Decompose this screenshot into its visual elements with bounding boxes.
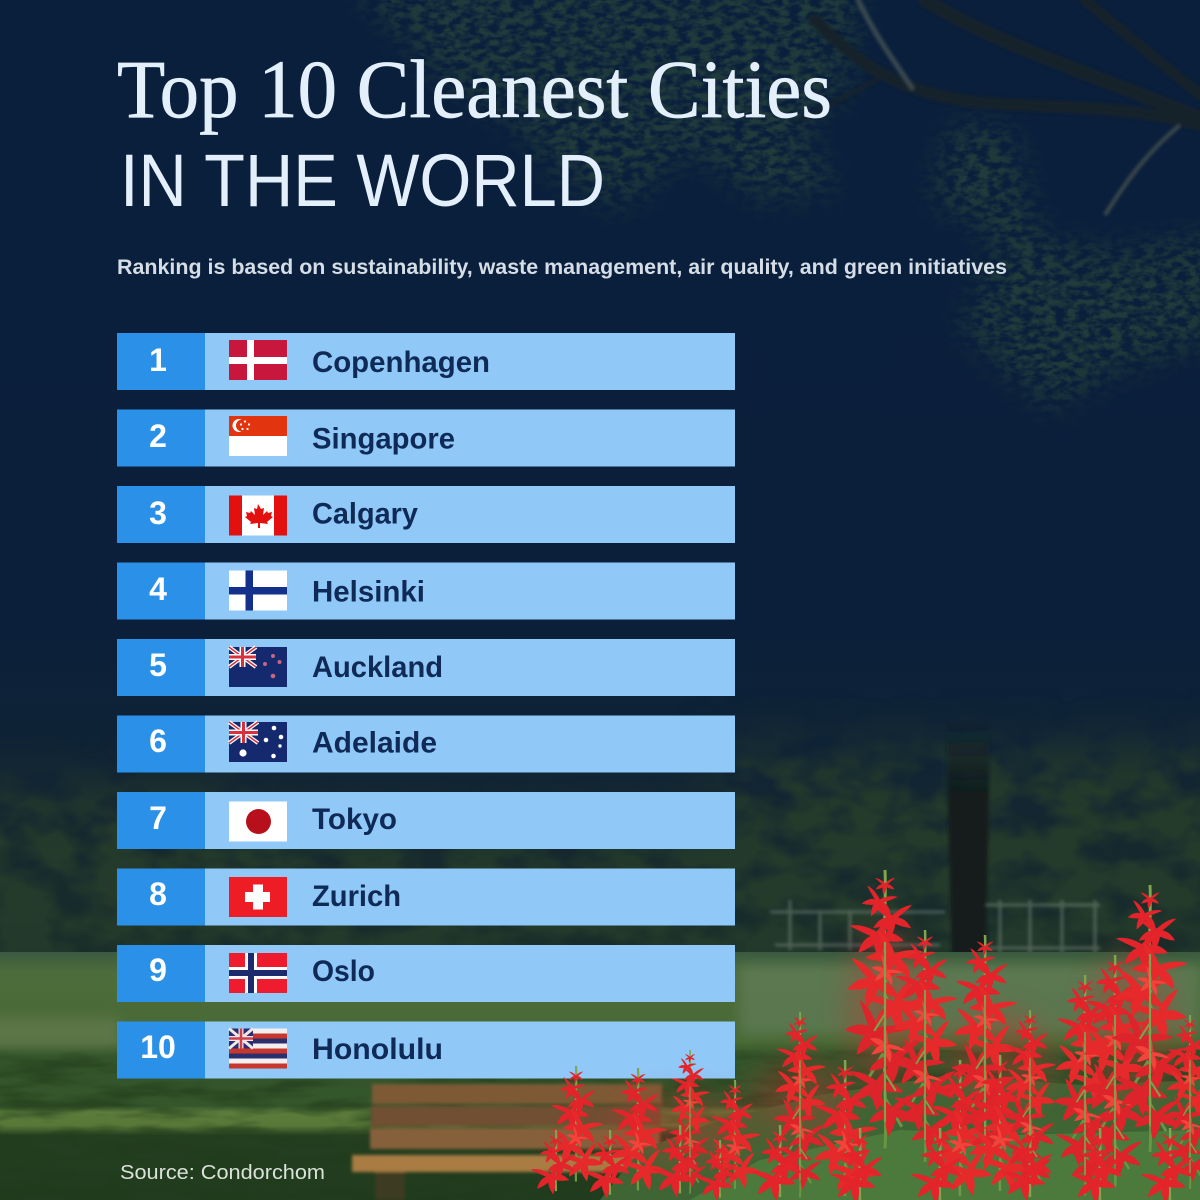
- flag: Australia: [229, 722, 287, 762]
- row 9 Oslo: 9: [149, 952, 167, 988]
- lawn: [0, 952, 1200, 1200]
- row 6 Adelaide: [117, 716, 735, 772]
- row 1 Copenhagen: [117, 333, 735, 390]
- row 5 Auckland: [117, 639, 735, 696]
- row 4 Helsinki: 4: [149, 571, 167, 607]
- flag: New Zealand: [229, 647, 287, 687]
- row 3 Calgary: Calgary: [312, 498, 418, 530]
- row 1 Copenhagen: Copenhagen: [312, 346, 490, 379]
- flag: Japan: [229, 802, 287, 842]
- bench: [352, 1084, 662, 1200]
- ranking list: [117, 333, 735, 1078]
- row 7 Tokyo: Tokyo: [312, 803, 397, 836]
- row 3 Calgary: [117, 486, 735, 543]
- flag: Singapore: [229, 416, 287, 456]
- red flowers foreground: [532, 870, 1200, 1200]
- subtitle: Ranking is based on sustainability, waste management, air quality, and green initiatives: [117, 256, 1007, 279]
- flag: Norway: [229, 953, 287, 993]
- flag: Finland: [229, 570, 287, 610]
- row 4 Helsinki: [117, 562, 735, 620]
- row 10 Honolulu: 10: [140, 1029, 176, 1065]
- background: tree canopy and branches: [340, 0, 1200, 410]
- flag: Denmark: [229, 340, 287, 380]
- flag: Hawaii: [229, 1028, 287, 1068]
- row 1 Copenhagen: 1: [149, 342, 167, 378]
- row 9 Oslo: Oslo: [312, 955, 375, 988]
- row 8 Zurich: 8: [149, 876, 167, 912]
- distant tree line: [0, 750, 1200, 980]
- row 2 Singapore: Singapore: [312, 422, 455, 456]
- title: [117, 43, 832, 222]
- fence: [770, 900, 1100, 955]
- row 6 Adelaide: 6: [149, 723, 167, 759]
- row 8 Zurich: [117, 868, 735, 926]
- row 7 Tokyo: [117, 792, 735, 849]
- row 2 Singapore: 2: [149, 418, 167, 454]
- row 4 Helsinki: Helsinki: [312, 576, 425, 608]
- row 5 Auckland: Auckland: [312, 651, 443, 684]
- row 3 Calgary: 3: [149, 495, 167, 531]
- row 6 Adelaide: Adelaide: [312, 726, 437, 760]
- row 10 Honolulu: Honolulu: [312, 1033, 443, 1066]
- row 7 Tokyo: 7: [149, 800, 167, 836]
- tree trunk: [946, 720, 990, 962]
- title line 2: IN THE WORLD: [120, 139, 605, 222]
- flag: Canada: [229, 496, 287, 536]
- row 10 Honolulu: [117, 1022, 735, 1078]
- row 2 Singapore: [117, 410, 735, 466]
- source note: Source: Condorchom: [120, 1162, 325, 1184]
- row 5 Auckland: 5: [149, 647, 167, 683]
- title line 1: Top 10 Cleanest Cities: [117, 43, 832, 135]
- flag: Switzerland: [229, 877, 287, 917]
- row 9 Oslo: [117, 945, 735, 1002]
- row 8 Zurich: Zurich: [312, 880, 401, 913]
